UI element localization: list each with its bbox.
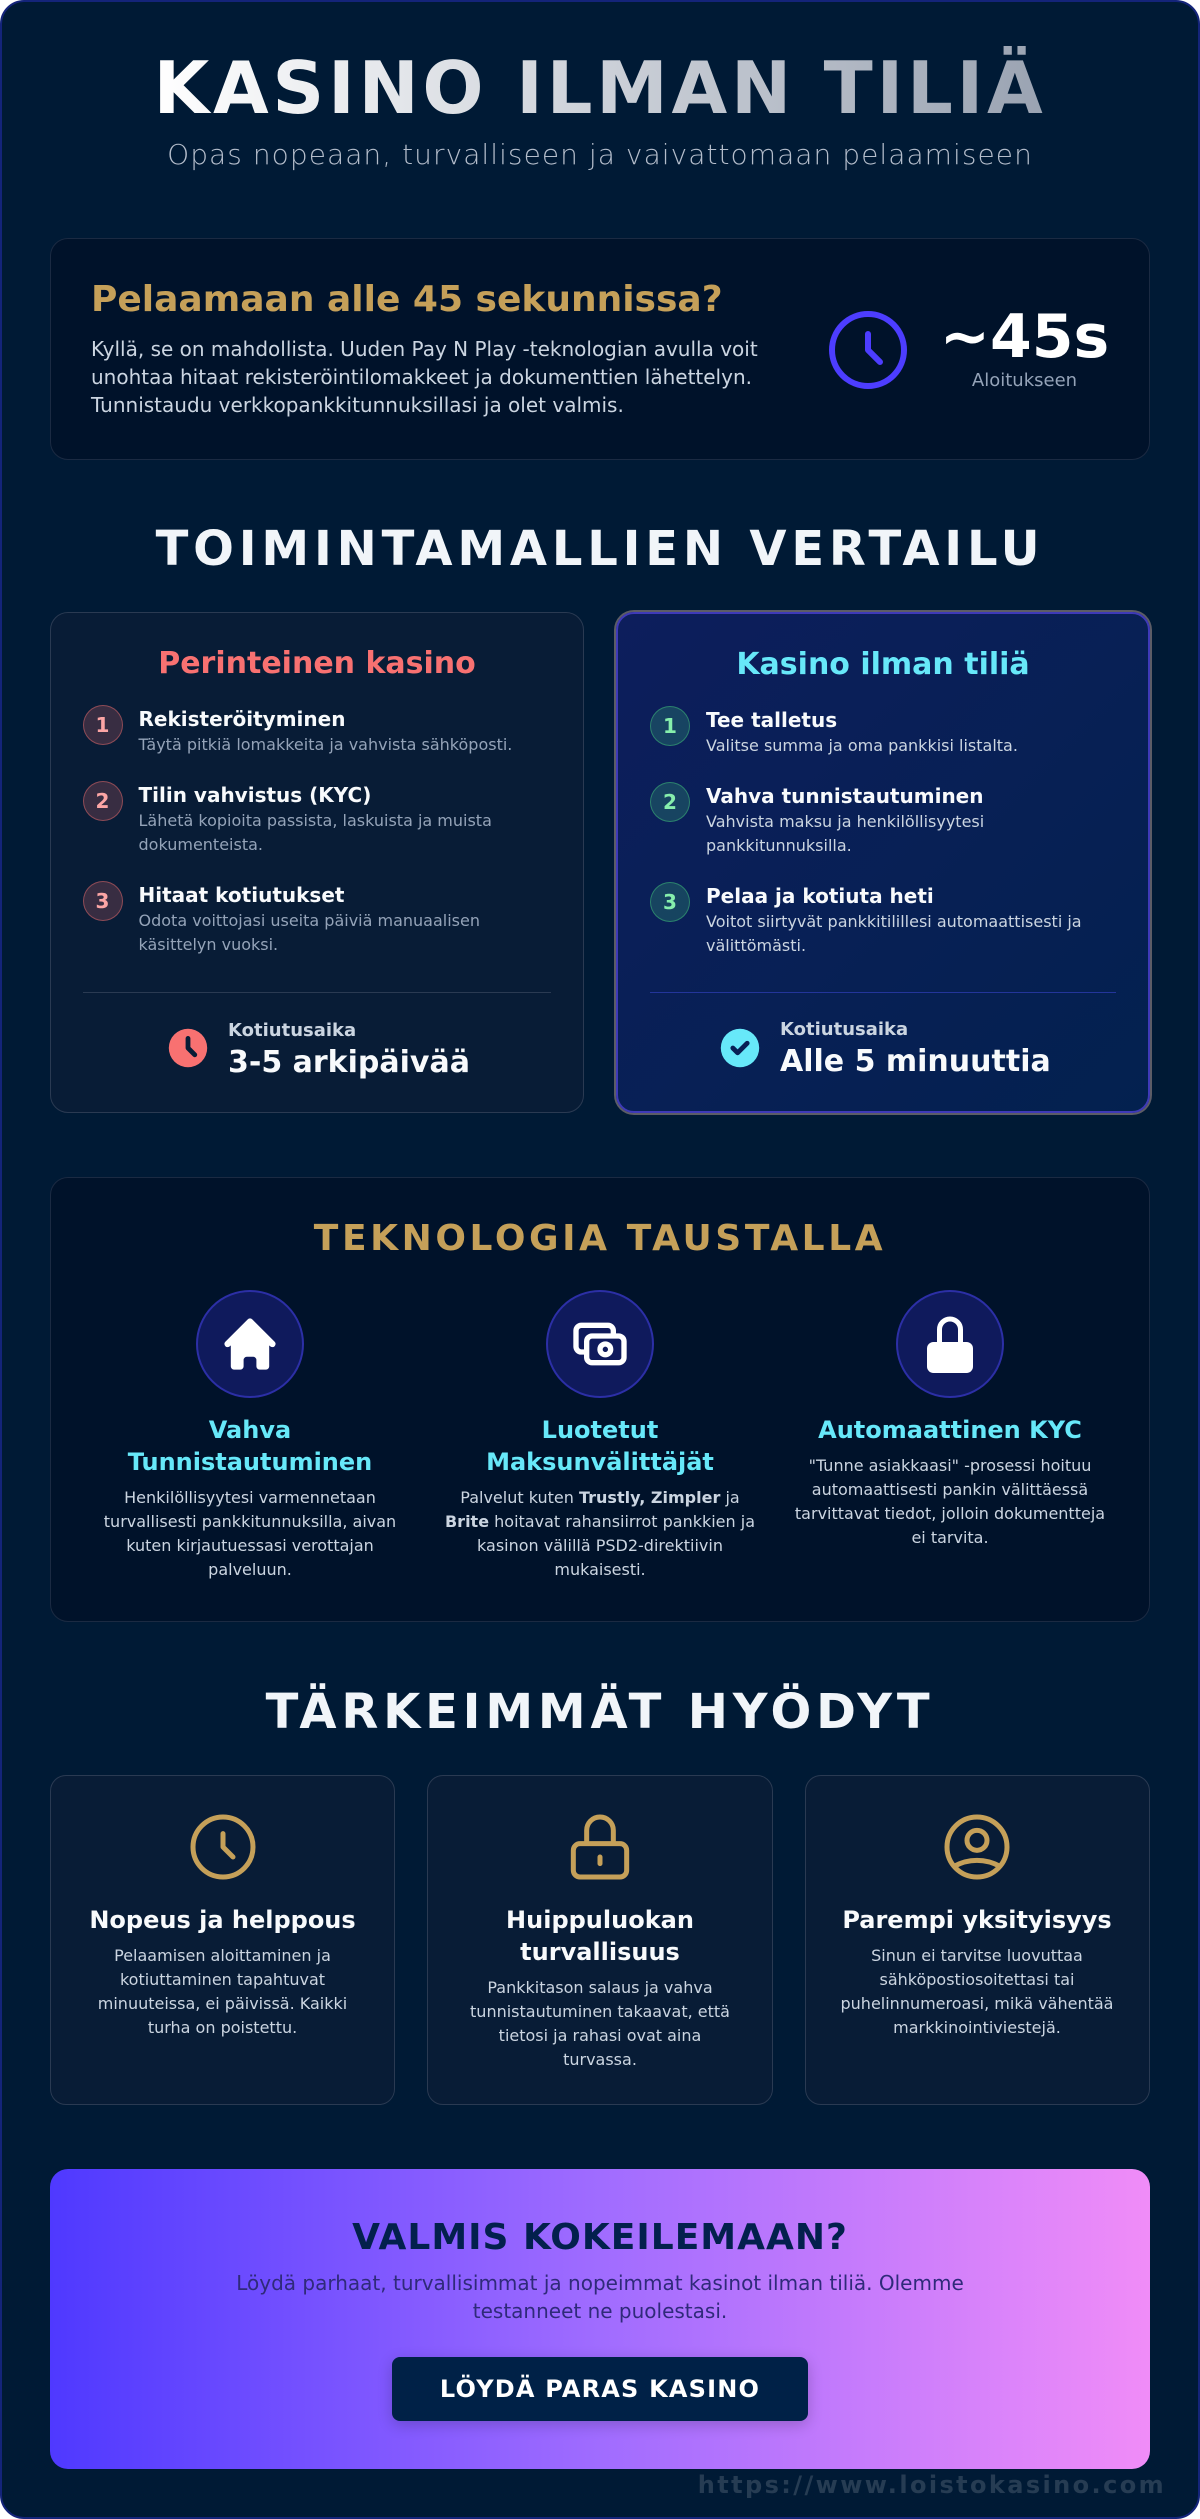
benefit title: Huippuluokan bbox=[506, 1906, 694, 1934]
step number bbox=[650, 882, 690, 922]
step text: Valitse summa ja oma pankkisi listalta. bbox=[706, 736, 1018, 755]
title: KASINO ILMAN TILIÄ bbox=[154, 46, 1046, 130]
item text bbox=[795, 1456, 1105, 1547]
step title: Rekisteröityminen bbox=[138, 707, 345, 731]
item text bbox=[104, 1488, 396, 1579]
step number: 2 bbox=[663, 790, 677, 814]
panel heading: Kasino ilman tiliä bbox=[736, 647, 1030, 682]
item text: Brite hoitavat rahansiirrot pankkien ja bbox=[445, 1512, 755, 1531]
step text: pankkitunnuksilla. bbox=[706, 836, 852, 855]
step text bbox=[706, 812, 984, 855]
step title: Pelaa ja kotiuta heti bbox=[706, 884, 934, 908]
benefit text bbox=[98, 1946, 347, 2036]
technology: automatic KYC bbox=[795, 1290, 1105, 1547]
benefit title: Nopeus ja helppous bbox=[89, 1906, 356, 1934]
icon: lock outline bbox=[570, 1814, 630, 1880]
intro heading: Pelaamaan alle 45 sekunnissa? bbox=[91, 279, 723, 320]
step text: dokumenteista. bbox=[138, 835, 263, 854]
step text bbox=[138, 811, 492, 854]
icon: clock solid bbox=[168, 1028, 208, 1068]
step number bbox=[82, 705, 122, 745]
technology: payment providers bbox=[445, 1290, 755, 1579]
technology: strong authentication bbox=[104, 1290, 396, 1579]
stat label: Aloitukseen bbox=[972, 370, 1077, 391]
icon: clock bbox=[829, 311, 907, 389]
step 1 bbox=[650, 706, 1018, 755]
CTA text: testanneet ne puolestasi. bbox=[473, 2299, 727, 2323]
icon: clock outline bbox=[190, 1814, 256, 1880]
item text: mukaisesti. bbox=[554, 1560, 646, 1579]
step title: Hitaat kotiutukset bbox=[138, 883, 344, 907]
payout value: Alle 5 minuuttia bbox=[780, 1044, 1051, 1079]
step number: 1 bbox=[96, 713, 109, 737]
benefit text: puhelinnumeroasi, mikä vähentää bbox=[840, 1994, 1113, 2012]
step title: Tilin vahvistus (KYC) bbox=[138, 783, 371, 807]
benefit text bbox=[470, 1978, 730, 2068]
step title: Vahva tunnistautuminen bbox=[706, 784, 983, 808]
panel: privacy benefit bbox=[805, 1775, 1150, 2105]
intro text: Kyllä, se on mahdollista. Uuden Pay N Play -teknologian avulla voit bbox=[91, 337, 758, 361]
step 3 bbox=[650, 882, 1082, 955]
intro text: unohtaa hitaat rekisteröintilomakkeet ja dokumenttien lähettelyn. bbox=[91, 365, 752, 389]
panel: traditional casino bbox=[50, 612, 584, 1113]
item title: Automaattinen KYC bbox=[818, 1416, 1082, 1444]
step text: Lähetä kopioita passista, laskuista ja muista bbox=[138, 811, 492, 830]
step title: Tee talletus bbox=[706, 708, 837, 732]
icon: lock bbox=[896, 1290, 1004, 1398]
icon: money bbox=[546, 1290, 654, 1398]
step number bbox=[650, 706, 690, 746]
heading: benefits: TÄRKEIMMÄT HYÖDYT bbox=[266, 1684, 934, 1740]
step number bbox=[650, 782, 690, 822]
item text bbox=[445, 1488, 755, 1579]
payout value: 3-5 arkipäivää bbox=[228, 1045, 470, 1080]
panel: speed benefit bbox=[50, 1775, 395, 2105]
item text: "Tunne asiakkaasi" -prosessi hoituu bbox=[809, 1456, 1091, 1475]
step 1 bbox=[83, 705, 512, 754]
panel: intro 45 seconds bbox=[50, 238, 1150, 460]
step text: Täytä pitkiä lomakkeita ja vahvista sähköposti. bbox=[138, 735, 512, 754]
benefit text bbox=[840, 1946, 1113, 2036]
item text: kuten kirjautuessasi verottajan bbox=[126, 1536, 374, 1555]
step number bbox=[82, 781, 122, 821]
benefit text: Pankkitason salaus ja vahva bbox=[487, 1978, 713, 1996]
benefit title bbox=[506, 1906, 694, 1966]
CTA text bbox=[236, 2271, 964, 2323]
step text: Voitot siirtyvät pankkitilillesi automaattisesti ja bbox=[706, 912, 1082, 931]
item title: Maksunvälittäjät bbox=[486, 1448, 714, 1476]
step text: Odota voittojasi useita päiviä manuaalisen bbox=[138, 911, 480, 930]
intro text: Tunnistaudu verkkopankkitunnuksillasi ja olet valmis. bbox=[91, 393, 624, 417]
item text: turvallisesti pankkitunnuksilla, aivan bbox=[104, 1512, 396, 1531]
step number: 2 bbox=[96, 789, 109, 813]
step text: Vahvista maksu ja henkilöllisyytesi bbox=[706, 812, 984, 831]
step number: 1 bbox=[663, 714, 677, 738]
item text: palveluun. bbox=[208, 1560, 292, 1579]
benefit title: turvallisuus bbox=[520, 1938, 680, 1966]
benefit text: minuuteissa, ei päivissä. Kaikki bbox=[98, 1994, 347, 2012]
step number: 3 bbox=[96, 889, 109, 913]
payout label: Kotiutusaika bbox=[780, 1019, 908, 1040]
benefit text: tunnistautuminen takaavat, että bbox=[470, 2002, 730, 2020]
panel: security benefit bbox=[427, 1775, 773, 2105]
CTA button: LÖYDÄ PARAS KASINO bbox=[440, 2375, 760, 2403]
payout label: Kotiutusaika bbox=[228, 1020, 356, 1041]
step text bbox=[138, 911, 480, 954]
heading: comparison: TOIMINTAMALLIEN VERTAILU bbox=[156, 521, 1044, 577]
item title: Tunnistautuminen bbox=[128, 1448, 372, 1476]
benefit title: Parempi yksityisyys bbox=[842, 1906, 1112, 1934]
panel: casino without account bbox=[616, 612, 1150, 1113]
step number bbox=[82, 881, 122, 921]
icon: house bbox=[196, 1290, 304, 1398]
step text: välittömästi. bbox=[706, 936, 806, 955]
panel heading: TEKNOLOGIA TAUSTALLA bbox=[314, 1218, 886, 1258]
benefit text: turha on poistettu. bbox=[148, 2018, 297, 2036]
item text: ei tarvita. bbox=[911, 1528, 989, 1547]
benefit text: Pelaamisen aloittaminen ja bbox=[114, 1946, 331, 1964]
item text: kasinon välillä PSD2-direktiivin bbox=[477, 1536, 723, 1555]
benefit text: tietosi ja rahasi ovat aina bbox=[499, 2026, 701, 2044]
item text: tarvittavat tiedot, jolloin dokumentteja bbox=[795, 1504, 1105, 1523]
item text: Henkilöllisyytesi varmennetaan bbox=[124, 1488, 376, 1507]
step 2 bbox=[83, 781, 492, 854]
item title: Luotetut bbox=[542, 1416, 658, 1444]
footer url: https://www.loistokasino.com bbox=[698, 2471, 1166, 2499]
step text bbox=[706, 912, 1082, 955]
CTA button bbox=[392, 2357, 808, 2421]
CTA heading: VALMIS KOKEILEMAAN? bbox=[352, 2217, 848, 2258]
panel heading: Perinteinen kasino bbox=[158, 646, 476, 681]
item text: Palvelut kuten Trustly, Zimpler ja bbox=[460, 1488, 740, 1507]
step text: käsittelyn vuoksi. bbox=[138, 935, 278, 954]
benefit text: kotiuttaminen tapahtuvat bbox=[120, 1970, 325, 1988]
benefit text: markkinointiviestejä. bbox=[893, 2018, 1061, 2036]
item title bbox=[486, 1416, 714, 1476]
item title: Vahva bbox=[209, 1416, 291, 1444]
benefit text: Sinun ei tarvitse luovuttaa bbox=[871, 1946, 1083, 1964]
intro text bbox=[90, 337, 758, 417]
benefit text: sähköpostiosoitettasi tai bbox=[880, 1970, 1074, 1988]
item text: automaattisesti pankin välittäessä bbox=[812, 1480, 1088, 1499]
icon: check circle bbox=[720, 1028, 760, 1068]
subtitle: Opas nopeaan, turvalliseen ja vaivattomaan pelaamiseen bbox=[167, 138, 1033, 171]
panel: technology bbox=[50, 1177, 1150, 1622]
step number: 3 bbox=[663, 890, 677, 914]
step 3 bbox=[83, 881, 480, 954]
panel: call to action bbox=[50, 2169, 1150, 2469]
item title bbox=[128, 1416, 372, 1476]
icon: user circle bbox=[944, 1814, 1010, 1880]
CTA text: Löydä parhaat, turvallisimmat ja nopeimmat kasinot ilman tiliä. Olemme bbox=[236, 2271, 964, 2295]
step 2 bbox=[650, 782, 984, 855]
stat: 45 seconds: ~45s bbox=[940, 302, 1109, 372]
benefit text: turvassa. bbox=[563, 2050, 637, 2068]
